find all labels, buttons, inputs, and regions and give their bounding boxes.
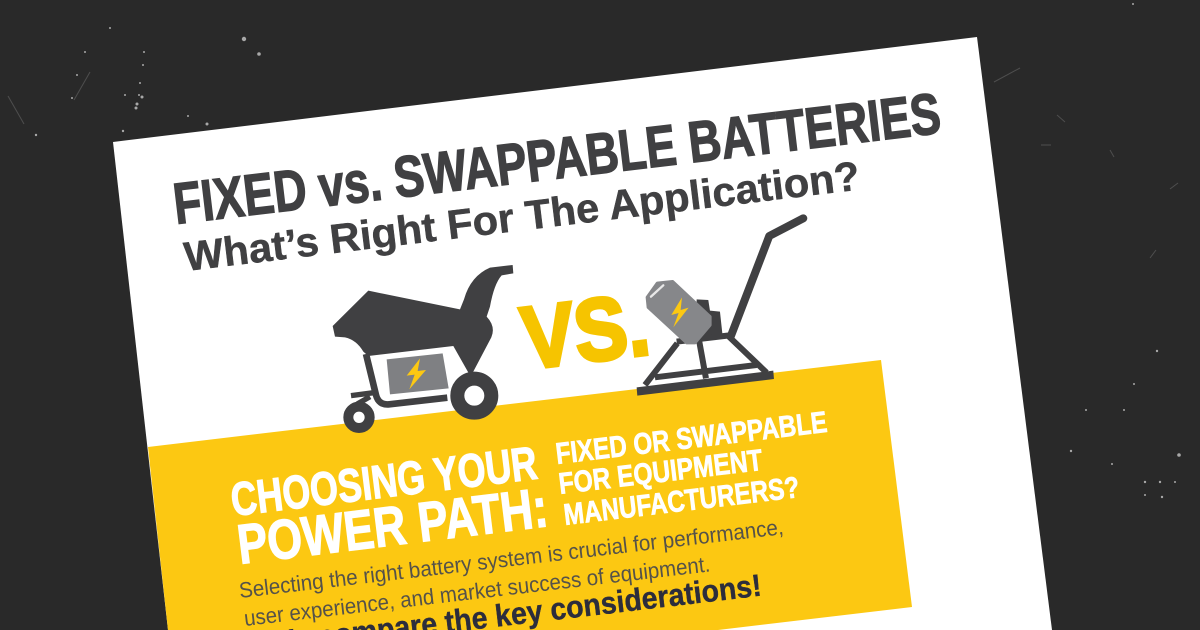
yellow intro band	[148, 360, 912, 630]
subheading: application question: What’s Right For The Application?	[182, 153, 862, 280]
axle arm	[351, 392, 377, 404]
vs label: VS.	[516, 274, 654, 388]
engine block	[697, 299, 723, 342]
swappable battery	[647, 282, 710, 343]
battery slot	[651, 285, 663, 297]
trowel frame	[645, 335, 767, 385]
fixed or swappable: FIXED OR SWAPPABLE	[554, 406, 829, 471]
base plate	[637, 371, 774, 396]
front wheel	[348, 407, 370, 428]
heading: fixed vs swappable batteries: FIXED vs. SWAPPABLE BATTERIES	[170, 81, 944, 237]
title	[170, 81, 944, 280]
sentence line two: user experience, and market success of equipment.	[243, 551, 711, 630]
choosing your: CHOOSING YOUR	[228, 436, 540, 526]
icon: fixed battery dumper machine	[333, 265, 513, 428]
white poster sheet	[113, 37, 1052, 630]
machine frame	[366, 354, 447, 404]
rear wheel	[457, 379, 491, 413]
battery bolt	[671, 297, 689, 327]
manufacturers: MANUFACTURERS?	[562, 471, 801, 532]
intro body text	[238, 514, 785, 630]
power path: POWER PATH:	[234, 475, 551, 576]
for equipment: FOR EQUIPMENT	[557, 444, 764, 501]
band heading	[228, 406, 829, 576]
handle	[731, 218, 803, 337]
machine hopper body	[333, 265, 513, 377]
icon: swappable battery trowel machine	[637, 218, 803, 396]
battery bolt	[407, 358, 426, 389]
sentence line one: Selecting the right battery system is crucial for performance,	[238, 514, 785, 603]
battery pack	[387, 353, 449, 394]
